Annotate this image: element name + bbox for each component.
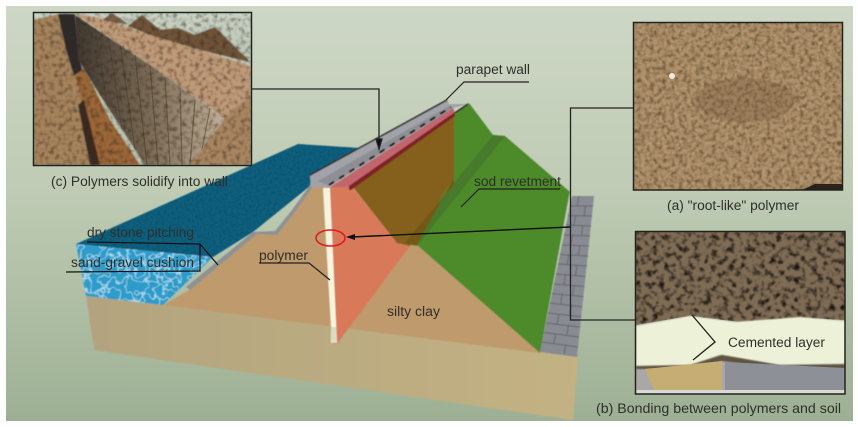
dark blue upstream water surface bbox=[70, 140, 365, 260]
sand-gravel cushion bbox=[76, 244, 214, 306]
cemented layer pointer bbox=[692, 315, 715, 360]
red location circle bbox=[316, 230, 345, 246]
label: dry stone pitching: dry stone pitching bbox=[87, 225, 194, 240]
label: sand-gravel cushion bbox=[66, 244, 200, 272]
photo a: root-like polymer bbox=[634, 22, 842, 190]
connector from photos a and b bbox=[570, 108, 635, 320]
label: dry stone pitching bbox=[87, 225, 218, 265]
caption c: (c) Polymers solidify into wall bbox=[51, 174, 228, 189]
cemented layer label: Cemented layer bbox=[728, 335, 826, 350]
polymer impact zone bbox=[330, 187, 410, 344]
photo c: polymer wall in trench bbox=[34, 12, 252, 166]
label: sand-gravel cushion: sand-gravel cushion bbox=[71, 255, 194, 270]
embankment 3D model bbox=[70, 100, 594, 420]
dry stone pitching strip bbox=[186, 185, 313, 290]
polymer wall bbox=[323, 188, 337, 343]
label: sod revetment: sod revetment bbox=[474, 174, 561, 189]
label: silty clay: silty clay bbox=[387, 304, 440, 319]
label: sod revetment bbox=[461, 174, 561, 207]
berm overlap bbox=[405, 178, 454, 245]
photo b: bonding layer bbox=[636, 232, 845, 394]
caption a: (a) "root-like" polymer bbox=[667, 198, 800, 213]
caption b: (b) Bonding between polymers and soil bbox=[596, 400, 841, 416]
label: polymer: polymer bbox=[259, 248, 309, 263]
arrow to polymer location bbox=[346, 227, 570, 240]
foundation block bbox=[86, 296, 578, 420]
sod revetment slope bbox=[397, 103, 570, 353]
label: polymer bbox=[259, 248, 330, 280]
label: parapet wall: parapet wall bbox=[456, 62, 530, 77]
brown seepage plane bbox=[353, 116, 454, 246]
connector c to parapet bbox=[251, 89, 382, 149]
label: parapet wall bbox=[446, 62, 530, 100]
silty clay dam body bbox=[163, 187, 540, 353]
brick paved road bbox=[540, 196, 594, 357]
sod berm strip bbox=[405, 135, 505, 246]
parapet wall bbox=[310, 100, 470, 190]
